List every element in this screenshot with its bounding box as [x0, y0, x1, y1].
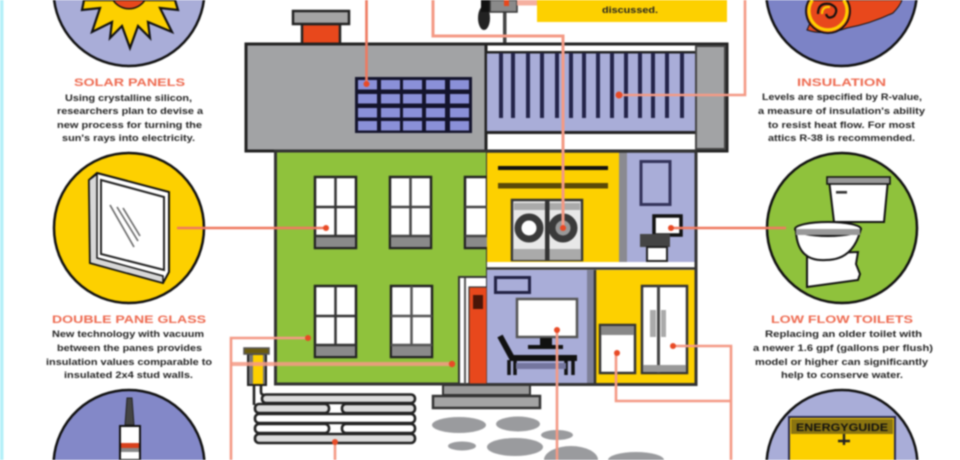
icon: insulation roll circle: [767, 0, 916, 66]
text block: insulation: a measure of insulation's ability: [758, 106, 926, 117]
bathroom: [619, 152, 696, 262]
chimney: [293, 11, 349, 76]
text block: insulation: [758, 77, 926, 144]
text block: double pane glass: [46, 314, 212, 381]
text block: double pane glass: insulated 2x4 stud walls.: [64, 370, 193, 381]
text block: solar panels: Using crystalline silicon,: [65, 93, 192, 104]
arrow: lower window leader: [231, 335, 311, 460]
kitchen: [595, 270, 696, 384]
arrow: washer leader: [433, 0, 566, 231]
text block: insulation: INSULATION: [797, 77, 886, 89]
living room: [487, 270, 595, 384]
house illustration: [246, 11, 727, 408]
laundry room: [487, 152, 619, 262]
arrow: window leader: [177, 225, 329, 231]
text block: low flow toilets: Replacing an older toilet with: [765, 329, 922, 340]
arrow: toilet leader: [668, 225, 786, 231]
text block: solar panels: SOLAR PANELS: [74, 77, 185, 89]
lower windows: [315, 286, 432, 357]
text block: low flow toilets: model or higher can significantly: [755, 357, 929, 368]
front door: [459, 277, 487, 384]
arrow: coil leader: [332, 439, 338, 460]
icon: energy guide circle: [767, 390, 917, 460]
text block: insulation: to resist heat flow. For most: [768, 120, 916, 131]
text block: low flow toilets: a newer 1.6 gpf (gallons per flush): [753, 343, 933, 354]
text block: insulation: Levels are specified by R-value,: [762, 92, 922, 103]
text block: double pane glass: between the panes provides: [57, 343, 202, 354]
text block: double pane glass: DOUBLE PANE GLASS: [52, 314, 206, 326]
solar panel array on roof: [355, 77, 472, 133]
icon: sun circle: [54, 0, 204, 66]
lower right wall outline: [487, 151, 696, 384]
arrow: television leader: [554, 327, 560, 460]
icon: energy guide circle: ENERGYGUIDE: [796, 422, 888, 434]
internal floor lines: [487, 152, 696, 384]
text block: low flow toilets: help to conserve water.: [781, 370, 903, 381]
upper windows: [315, 177, 487, 248]
front steps: [433, 385, 540, 408]
rain barrel: [244, 348, 269, 385]
callout: yellow note box: discussed.: [602, 5, 658, 16]
text block: double pane glass: New technology with vacuum: [52, 329, 204, 340]
text block: low flow toilets: [753, 314, 933, 381]
text block: solar panels: new process for turning the: [57, 120, 202, 131]
icon: caulk gun circle: [54, 390, 204, 460]
green exterior wall: [276, 151, 488, 384]
stepping stones: [432, 416, 664, 460]
arrow: solar panel leader: [364, 0, 370, 87]
icon: double pane window circle: [54, 153, 204, 303]
floor divider strip: [487, 262, 696, 270]
geothermal pipe coils: [254, 385, 415, 443]
text block: low flow toilets: LOW FLOW TOILETS: [771, 314, 913, 326]
left page edge band: [0, 0, 4, 460]
icon: low flow toilet circle: [767, 153, 917, 303]
arrow: door leader: [231, 361, 455, 367]
text block: insulation: attics R-38 is recommended.: [768, 133, 915, 144]
roof: left gray section: [246, 44, 487, 151]
text block: double pane glass: insulation values comparable to: [46, 357, 212, 368]
attic cutaway with insulation bars: [486, 44, 727, 151]
arrow: refrigerator leader: [670, 343, 731, 460]
icon: thermostat device: [478, 0, 537, 44]
text block: solar panels: researchers plan to devise a: [57, 106, 204, 117]
arrow: insulation leader: [616, 0, 745, 98]
text block: solar panels: [57, 77, 204, 144]
callout: yellow note box: [537, 0, 727, 22]
arrow: dishwasher leader: [614, 350, 731, 401]
text block: solar panels: sun's rays into electricity.: [62, 133, 195, 144]
